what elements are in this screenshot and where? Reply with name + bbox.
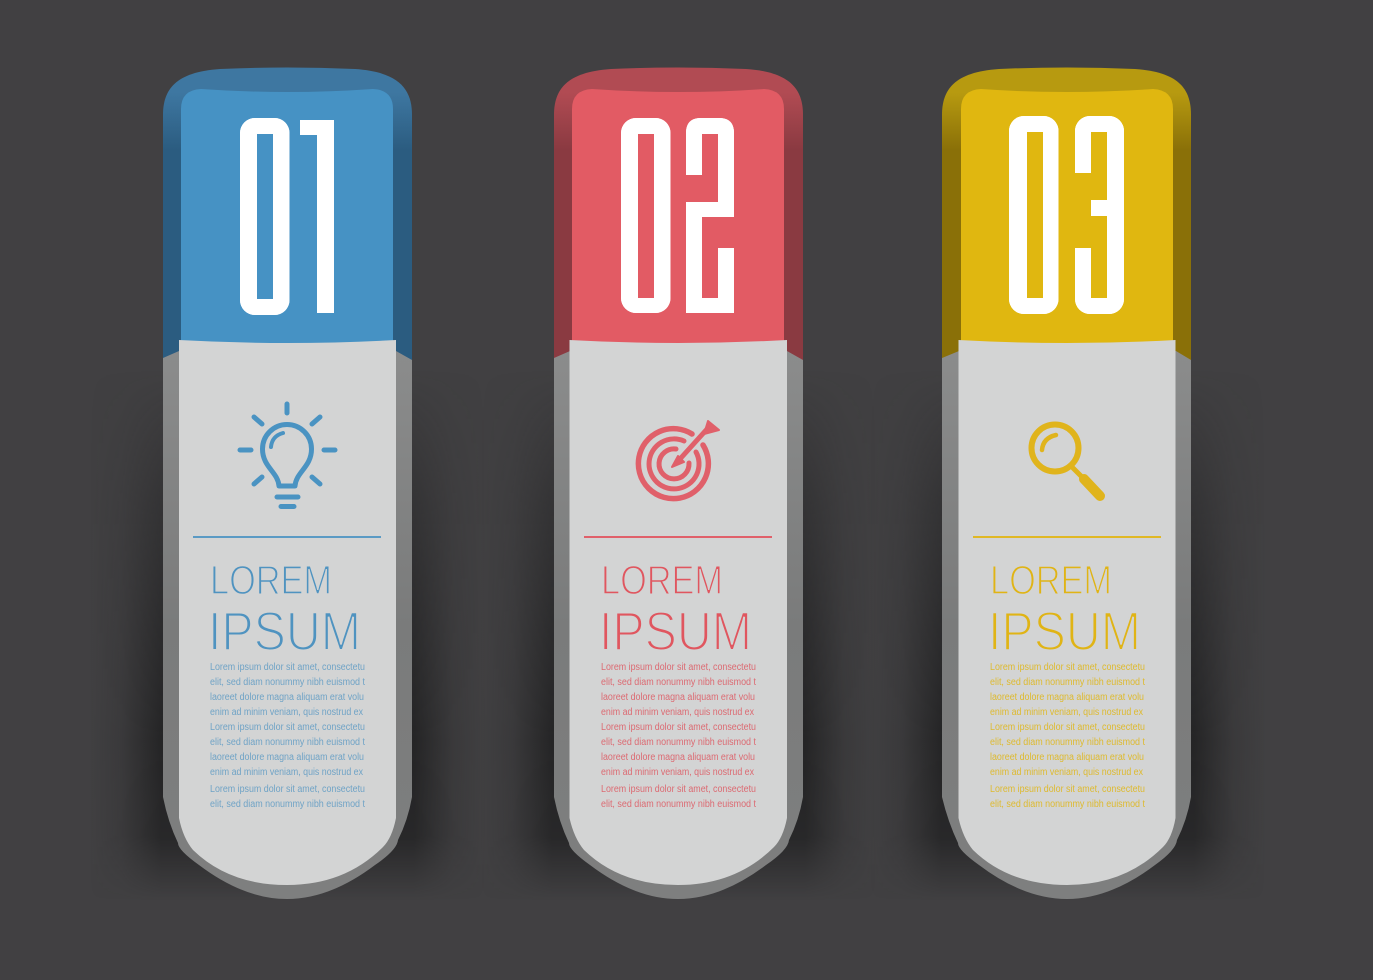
body text: enim ad minim veniam, quis nostrud ex: [990, 767, 1143, 778]
card 02 shadow: [514, 450, 844, 880]
body text: laoreet dolore magna aliquam erat volu: [601, 692, 755, 703]
body text: elit, sed diam nonummy nibh euismod t: [601, 799, 756, 810]
card 03 number panel: [961, 89, 1173, 345]
card 02 light panel: [570, 340, 787, 885]
card 03 number: 0: [984, 4, 1084, 428]
icon: magnifying glass: [1032, 424, 1100, 496]
body text: enim ad minim veniam, quis nostrud ex: [601, 767, 754, 778]
card 03 light panel: [958, 340, 1176, 885]
body text: Lorem ipsum dolor sit amet, consectetu: [990, 722, 1145, 733]
card 01 number panel: [181, 89, 393, 345]
card 02 number: 0: [596, 4, 696, 428]
card 03 number: [1009, 116, 1124, 314]
panel: card 02: [514, 68, 844, 899]
body text: Lorem ipsum dolor sit amet, consectetu: [990, 784, 1145, 795]
body text: Lorem ipsum dolor sit amet, consectetu: [601, 722, 756, 733]
body text: elit, sed diam nonummy nibh euismod t: [601, 677, 756, 688]
body text: laoreet dolore magna aliquam erat volu: [990, 752, 1144, 763]
card 01 light panel: [179, 340, 396, 885]
card 01 colored back: [163, 68, 412, 370]
body text: [990, 662, 1145, 810]
icon: target with arrow: [638, 421, 719, 499]
card 01 number: [240, 118, 334, 315]
divider: [193, 536, 381, 538]
card 03 colored back: [942, 68, 1191, 370]
panel: card 03: [903, 68, 1232, 899]
infographic canvas: [122, 68, 1232, 899]
body text: Lorem ipsum dolor sit amet, consectetu: [990, 662, 1145, 673]
body text: elit, sed diam nonummy nibh euismod t: [601, 737, 756, 748]
card 01 number: 0: [215, 5, 315, 429]
card 02 number: 2: [660, 42, 760, 399]
card 01 number: 1: [273, 37, 373, 394]
heading: IPSUM: IPSUM: [599, 600, 752, 662]
card 02 number panel: [572, 89, 784, 345]
card 01 shadow: [122, 450, 452, 880]
body text: enim ad minim veniam, quis nostrud ex: [601, 707, 754, 718]
body text: elit, sed diam nonummy nibh euismod t: [990, 737, 1145, 748]
body text: Lorem ipsum dolor sit amet, consectetu: [601, 662, 756, 673]
body text: elit, sed diam nonummy nibh euismod t: [990, 799, 1145, 810]
card 02 colored back: [554, 68, 803, 370]
card 02 number: [621, 118, 734, 313]
body text: laoreet dolore magna aliquam erat volu: [210, 692, 364, 703]
body text: laoreet dolore magna aliquam erat volu: [601, 752, 755, 763]
card 01 gray body back: [163, 351, 412, 899]
card 02 gray body back: [554, 351, 803, 899]
card 03 gray body back: [942, 351, 1191, 899]
body text: Lorem ipsum dolor sit amet, consectetu: [210, 662, 365, 673]
body text: enim ad minim veniam, quis nostrud ex: [210, 707, 363, 718]
body text: [601, 662, 756, 810]
heading: LOREM: LOREM: [210, 557, 332, 603]
body text: Lorem ipsum dolor sit amet, consectetu: [210, 784, 365, 795]
card 03 number: 3: [1049, 15, 1149, 417]
icon: light bulb: [240, 404, 335, 506]
divider: [973, 536, 1161, 538]
body text: elit, sed diam nonummy nibh euismod t: [210, 799, 365, 810]
body text: Lorem ipsum dolor sit amet, consectetu: [210, 722, 365, 733]
body text: laoreet dolore magna aliquam erat volu: [990, 692, 1144, 703]
body text: Lorem ipsum dolor sit amet, consectetu: [601, 784, 756, 795]
body text: elit, sed diam nonummy nibh euismod t: [990, 677, 1145, 688]
panel: card 01: [122, 68, 452, 899]
heading: IPSUM: IPSUM: [208, 600, 361, 662]
body text: enim ad minim veniam, quis nostrud ex: [990, 707, 1143, 718]
body text: enim ad minim veniam, quis nostrud ex: [210, 767, 363, 778]
body text: laoreet dolore magna aliquam erat volu: [210, 752, 364, 763]
body text: [210, 662, 365, 810]
heading: IPSUM: IPSUM: [988, 600, 1141, 662]
heading: LOREM: LOREM: [601, 557, 723, 603]
card 03 shadow: [903, 450, 1232, 880]
heading: LOREM: LOREM: [990, 557, 1112, 603]
divider: [584, 536, 772, 538]
body text: elit, sed diam nonummy nibh euismod t: [210, 737, 365, 748]
body text: elit, sed diam nonummy nibh euismod t: [210, 677, 365, 688]
